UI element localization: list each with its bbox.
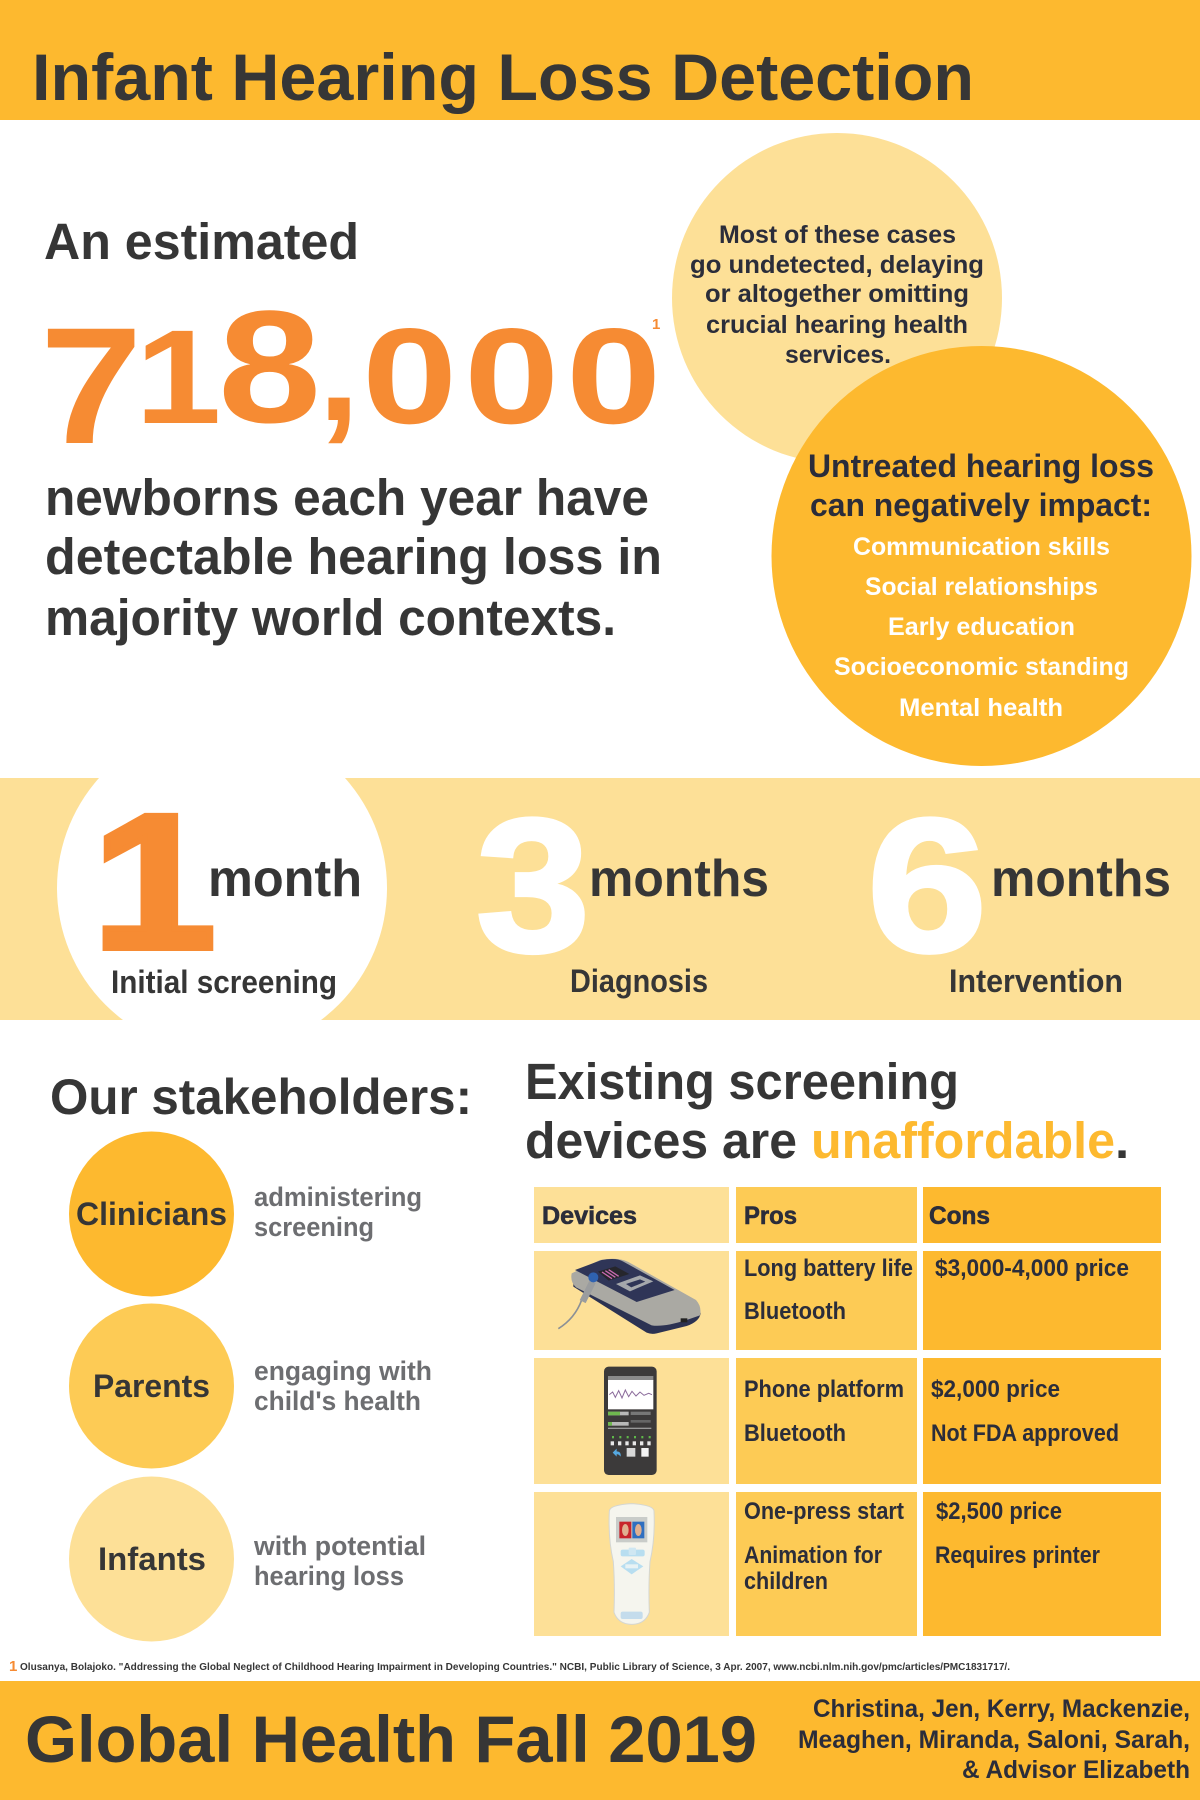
callout circle: impact of untreated hearing loss: can negatively impact:	[810, 487, 1152, 523]
title banner	[0, 0, 1200, 120]
stakeholder: clinicians: Clinicians	[76, 1196, 227, 1232]
callout circle: impact of untreated hearing loss: Untreated hearing loss	[808, 448, 1154, 484]
callout circle: impact of untreated hearing loss: Mental health	[899, 694, 1063, 722]
headline statistic	[40, 213, 662, 646]
stakeholder: parents: child's health	[254, 1386, 421, 1416]
icon: phone screener	[604, 1367, 657, 1475]
team credits: Christina, Jen, Kerry, Mackenzie,	[813, 1695, 1190, 1723]
timeline: 1 month: Initial screening	[111, 964, 337, 1000]
team credits: Meaghen, Miranda, Saloni, Sarah,	[798, 1726, 1190, 1754]
table row 1: Bluetooth	[744, 1298, 846, 1325]
table row 1: Long battery life	[744, 1255, 913, 1282]
big number 718,000: 8	[218, 277, 321, 456]
title banner: Infant Hearing Loss Detection	[32, 40, 974, 114]
timeline: 6 months	[867, 780, 1171, 999]
table row 2	[534, 1358, 1161, 1484]
footnote citation: 1	[9, 1658, 17, 1675]
big number 718,000: 0	[464, 300, 559, 452]
stakeholder: parents: Parents	[93, 1368, 210, 1404]
stakeholder: parents	[69, 1304, 432, 1468]
table header row	[534, 1187, 1161, 1243]
headline statistic: An estimated	[44, 213, 359, 270]
timeline: 6 months: months	[991, 850, 1171, 908]
callout circle: undetected cases: services.	[785, 341, 891, 369]
timeline: 3 months: months	[589, 850, 769, 908]
timeline: 1 month: 1	[92, 774, 216, 989]
table row 2: $2,000 price	[931, 1376, 1060, 1403]
callout circle: impact of untreated hearing loss: Socioeconomic standing	[834, 653, 1129, 681]
table header row: Devices	[542, 1202, 637, 1230]
callout circle: impact of untreated hearing loss: Social relationships	[865, 573, 1098, 601]
headline statistic: newborns each year have	[45, 469, 649, 526]
big number 718,000: 7	[40, 293, 142, 479]
table row 2: Phone platform	[744, 1376, 904, 1403]
timeline: 1 month	[92, 774, 362, 1000]
icon: wand screener	[609, 1504, 654, 1624]
callout circle: undetected cases: Most of these cases	[719, 221, 956, 249]
table row 3: children	[744, 1568, 828, 1595]
stakeholders heading: Our stakeholders:	[50, 1069, 472, 1125]
callout circle: undetected cases: or altogether omitting	[705, 280, 969, 308]
table row 3	[534, 1492, 1161, 1636]
callout circle: impact of untreated hearing loss: Early education	[888, 613, 1075, 641]
headline statistic: majority world contexts.	[45, 589, 616, 646]
devices heading: Existing screening	[525, 1053, 959, 1110]
callout circle: impact of untreated hearing loss: Communication skills	[853, 533, 1110, 561]
footer banner: Global Health Fall 2019	[25, 1702, 757, 1776]
devices heading	[525, 1053, 1129, 1169]
big number 718,000: 0	[362, 300, 457, 452]
stakeholder: infants: hearing loss	[254, 1561, 404, 1591]
table row 3: $2,500 price	[936, 1498, 1062, 1525]
headline statistic: 1	[652, 316, 660, 333]
stakeholder: infants: Infants	[98, 1541, 206, 1577]
table row 2: Bluetooth	[744, 1420, 846, 1447]
footnote citation	[9, 1658, 1010, 1675]
timeline: 3 months: Diagnosis	[570, 963, 708, 999]
callout circle: undetected cases: go undetected, delaying	[690, 251, 984, 279]
timeline: 3 months	[476, 780, 769, 999]
table row 1	[534, 1251, 1161, 1350]
footnote citation: Olusanya, Bolajoko. "Addressing the Global Neglect of Childhood Hearing Impairment in Developing Countries." NCBI, Public Library of Science, 3 Apr. 2007, www.ncbi.nlm.nih.gov/pmc/articles/PMC1831717/.	[20, 1661, 1010, 1673]
team credits	[798, 1695, 1190, 1784]
big number 718,000: 1	[135, 302, 221, 452]
table header row: Pros	[744, 1202, 797, 1230]
table row 3: Requires printer	[935, 1542, 1100, 1569]
devices heading: unaffordable	[811, 1112, 1115, 1169]
stakeholder: clinicians: screening	[254, 1212, 374, 1242]
callout circle: impact of untreated hearing loss	[772, 346, 1192, 766]
big number 718,000: 0	[566, 300, 661, 452]
callout circle: undetected cases	[672, 133, 1002, 463]
stakeholder: clinicians	[69, 1132, 422, 1296]
icon: handheld screener	[558, 1259, 701, 1334]
big number 718,000: ,	[318, 284, 360, 452]
stakeholder: parents: engaging with	[254, 1356, 432, 1386]
big number 718,000	[40, 277, 661, 479]
stakeholder: infants	[69, 1476, 426, 1642]
devices heading: devices are	[525, 1112, 797, 1169]
timeline: 6 months: Intervention	[949, 963, 1123, 999]
table header row: Cons	[929, 1202, 990, 1230]
white highlight circle	[57, 778, 387, 1020]
footer banner	[0, 1681, 1200, 1800]
device comparison table	[534, 1187, 1161, 1636]
callout circle: undetected cases: crucial hearing health	[706, 311, 968, 339]
headline statistic: detectable hearing loss in	[45, 528, 662, 585]
timeline: 1 month: month	[208, 850, 362, 908]
table row 2: Not FDA approved	[931, 1420, 1119, 1447]
table row 1: $3,000-4,000 price	[935, 1255, 1129, 1282]
table row 3: Animation for	[744, 1542, 882, 1569]
devices heading: .	[1115, 1112, 1129, 1169]
stakeholder: infants: with potential	[253, 1531, 426, 1561]
timeline: 3 months: 3	[476, 780, 590, 992]
stakeholder: clinicians: administering	[254, 1182, 422, 1212]
table row 3: One-press start	[744, 1498, 904, 1525]
timeline: 6 months: 6	[867, 780, 987, 992]
timeline band	[0, 778, 1200, 1020]
team credits: & Advisor Elizabeth	[962, 1756, 1190, 1784]
